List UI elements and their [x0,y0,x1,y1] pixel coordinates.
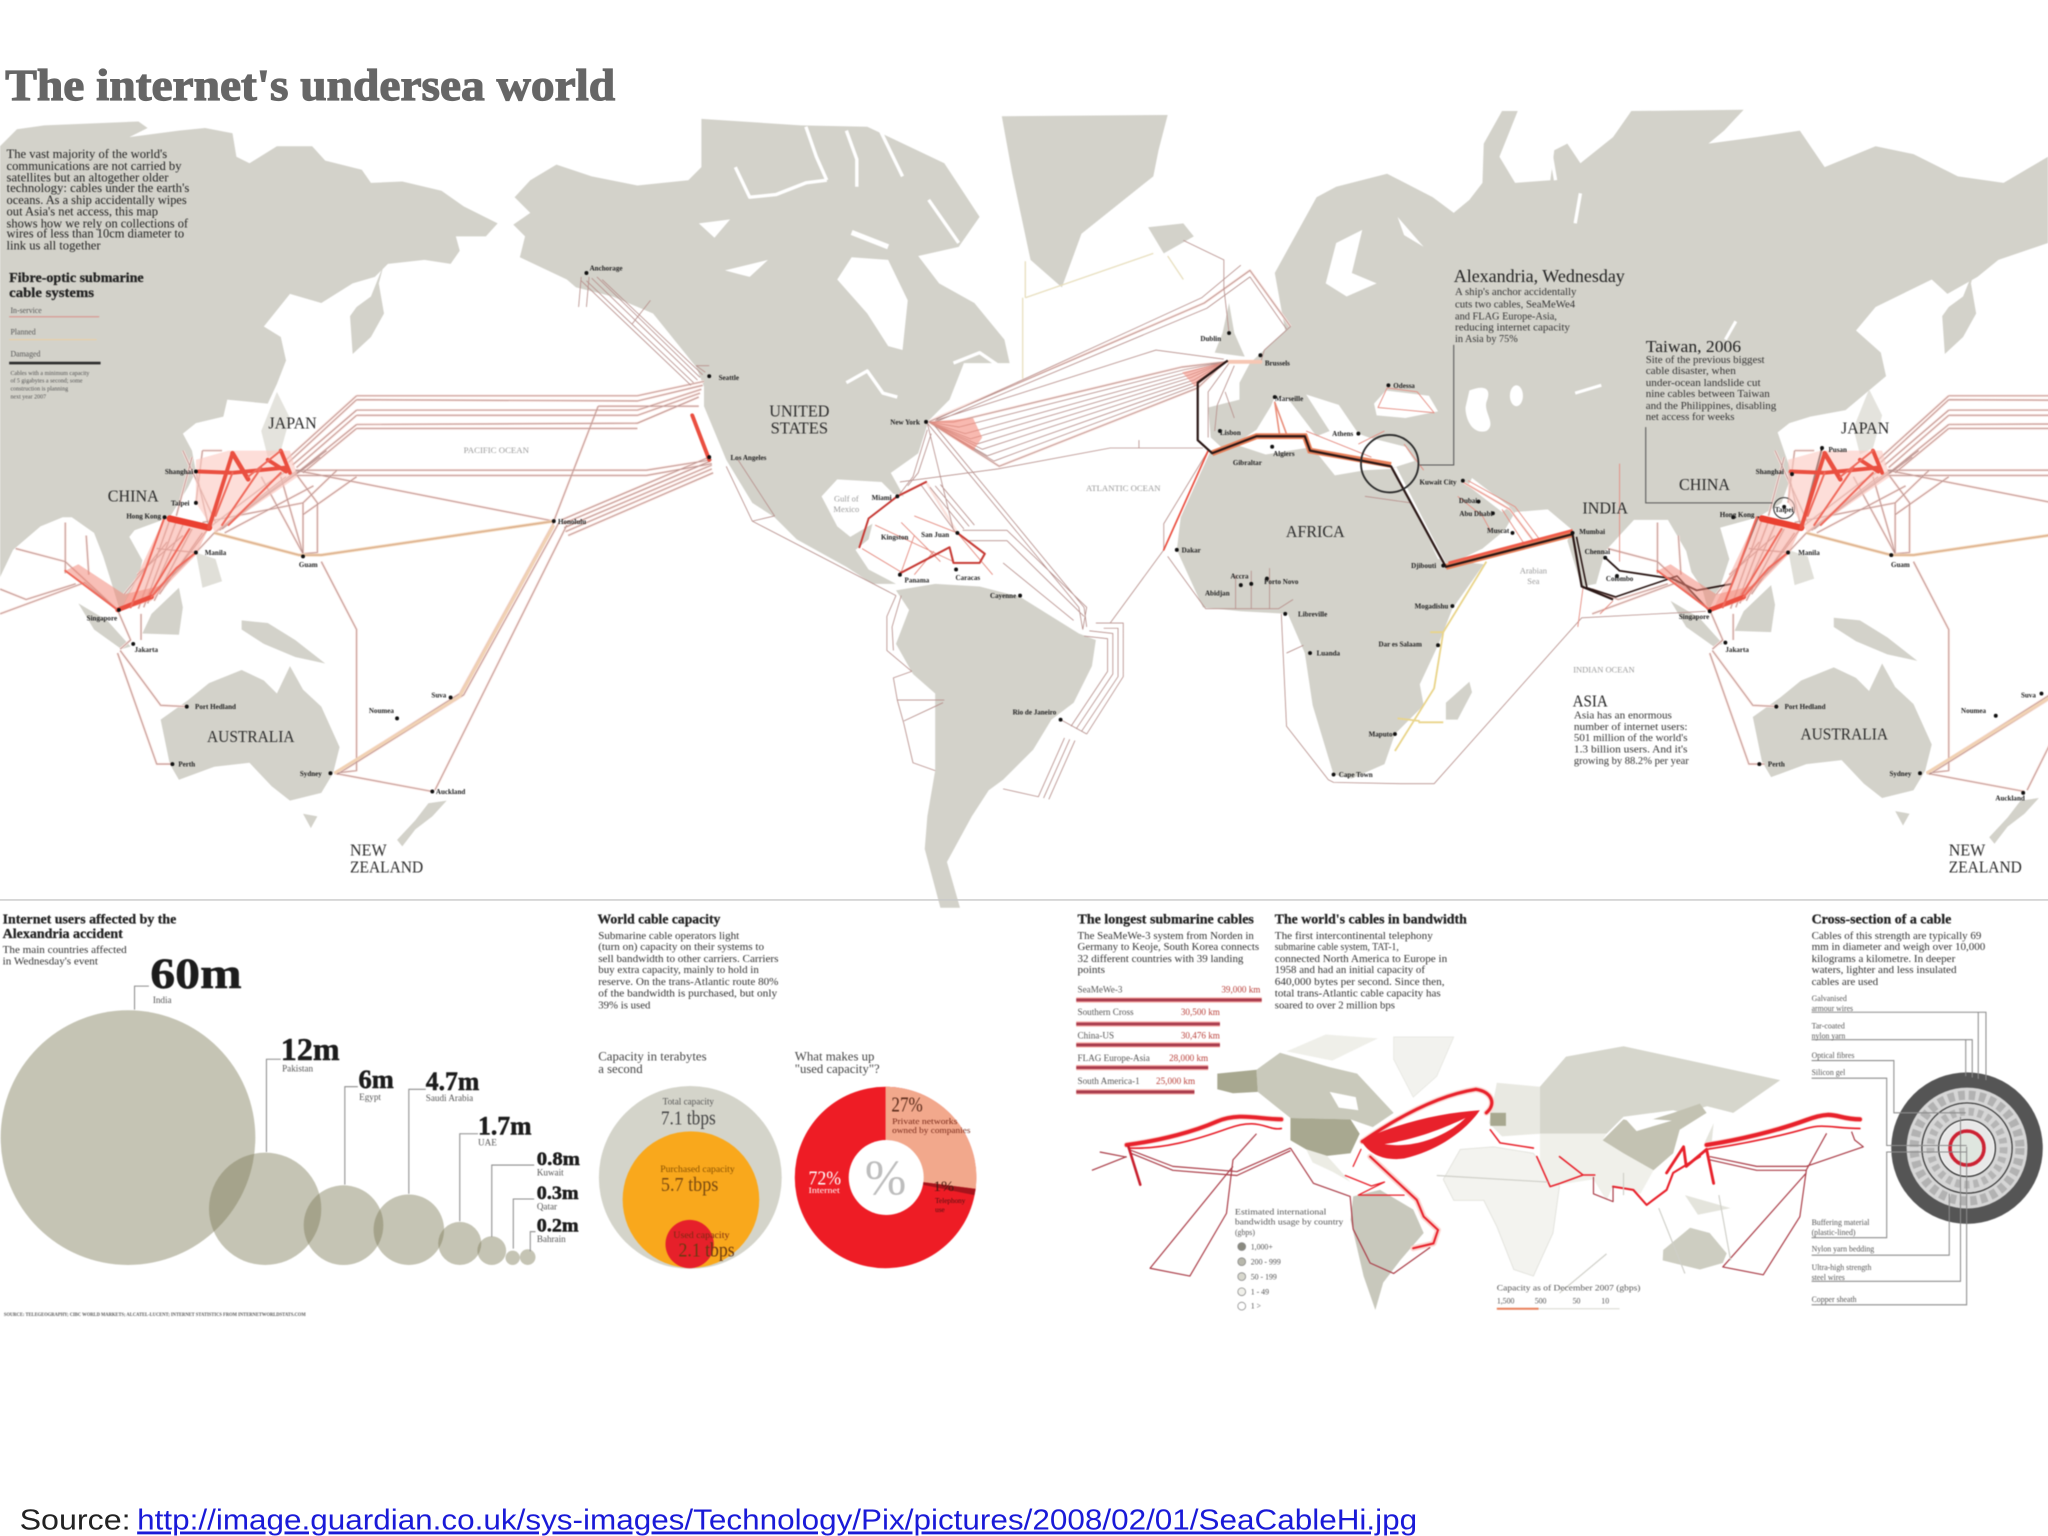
ocean labels: ATLANTIC OCEAN [1086,483,1160,493]
body text: The SeaMeWe-3 system from Norden in [1078,931,1255,942]
mini world map: land by usage [1217,1034,1780,1310]
cables: pale halo [0,270,2048,792]
city labels: Singapore [1679,613,1709,621]
city labels: Los Angeles [730,454,767,462]
intro text block: shows how we rely on collections of [7,215,189,230]
city labels: Shanghai [1756,468,1784,476]
value: Kuwait [537,1149,580,1178]
country labels: NEW [1949,841,1985,860]
body text: 39% is used [598,1000,651,1011]
mini map legend: bandwidth usage: 1 - 49 [1251,1287,1269,1296]
country labels [108,402,2022,876]
city labels: Port Hedland [195,703,236,711]
used capacity subheading [795,1050,880,1076]
panel: internet users affected [1,911,580,1318]
heading: in Wednesday's event [3,957,98,968]
body text: submarine cable system, TAT-1, [1275,942,1399,953]
intro text block [7,146,189,252]
callout: Asia: 501 million of the world's [1574,733,1688,744]
legend: fibre-optic cable systems: Fibre-optic submarine [9,270,144,285]
body text: The first intercontinental telephony [1275,931,1434,942]
capacity subheading [598,1050,707,1076]
city labels: Noumea [1961,707,1987,715]
capacity subheading: a second [598,1062,643,1076]
body text [1078,931,1259,976]
city labels: Kingston [881,533,908,541]
body text: connected North America to Europe in [1275,954,1448,965]
leader lines [1812,1012,1986,1305]
bar chart: cable lengths: 39,000 km [1221,985,1260,995]
city labels: Honolulu [558,518,586,526]
city labels: Caracas [956,574,980,582]
mini map legend: capacity: 50 [1573,1297,1580,1306]
city labels: Athens [1332,430,1354,438]
donut chart: Internet [808,1186,841,1195]
city labels [87,264,2036,803]
callout: Alexandria: A ship's anchor accidentally [1455,287,1577,298]
panel: cables in bandwidth [1092,911,1863,1311]
ocean labels: PACIFIC OCEAN [464,445,529,455]
intro text block: out Asia's net access, this map [7,204,158,219]
bar chart: cable lengths: SeaMeWe-3 [1078,985,1123,995]
source footer: http://image.guardian.co.uk/sys-images/Technology/Pix/pictures/2008/02/01/SeaCableHi.jpg [137,1504,1417,1536]
bar chart: cable lengths: Southern Cross [1078,1007,1134,1017]
country labels: AUSTRALIA [207,727,295,746]
city labels: Luanda [1317,650,1341,658]
callout: Taiwan: Site of the previous biggest [1646,355,1765,366]
body text: mm in diameter and weigh over 10,000 [1812,942,1985,953]
panel: world cable capacity [598,911,976,1269]
city labels: Panama [905,577,930,585]
city labels: Suva [2021,691,2036,699]
city dots [119,273,2041,793]
city labels: Singapore [87,614,117,622]
callout: Asia: 1.3 billion users. And it's [1574,744,1688,755]
city labels: Sydney [1889,770,1912,778]
component labels: Tar-coated [1812,1022,1845,1031]
component labels: nylon yarn [1812,1031,1845,1040]
body text: Germany to Keoje, South Korea connects [1078,942,1259,953]
city labels: Brussels [1265,360,1290,368]
mini map legend: bandwidth usage: 1 > [1251,1302,1262,1311]
body text: (turn on) capacity on their systems to [598,942,764,953]
country labels: JAPAN [268,413,317,432]
mini map legend: bandwidth usage: (gbps) [1235,1228,1255,1237]
heading: The longest submarine cables [1078,911,1254,926]
city labels: Libreville [1298,610,1327,618]
donut chart: owned by companies [892,1125,970,1135]
body text: soared to over 2 million bps [1275,1000,1395,1011]
legend: fibre-optic cable systems: Planned [10,327,36,336]
component labels [1812,994,1874,1304]
callout: Asia: ASIA [1573,692,1608,711]
ocean labels: Sea [1527,576,1540,586]
country labels: ZEALAND [1949,857,2022,876]
country labels: JAPAN [1841,419,1889,438]
donut chart: 1% [933,1179,954,1195]
city labels: Seattle [719,374,739,382]
cable cross-section diagram [1899,1080,2035,1216]
cables: damaged routes Europe to Asia [1198,360,1822,611]
value: UAE: UAE [478,1137,497,1147]
city labels: Taipei [171,499,190,507]
city labels: Cayenne [990,592,1016,600]
legend: fibre-optic cable systems: construction is planning [10,387,68,393]
legend: fibre-optic cable systems [9,270,144,400]
intro text block: technology: cables under the earth's [7,180,189,195]
legend: fibre-optic cable systems: next year 2007 [10,394,46,400]
cables: Asia thick bundles, right [1657,451,2048,773]
nested capacity circles: Used capacity [673,1230,730,1240]
city labels: Manila [1798,549,1820,557]
city labels: Guam [299,561,318,569]
city labels: Marseille [1275,395,1303,403]
city labels: Suva [431,691,447,699]
mini world map: cable capacity lines [1092,1089,1863,1293]
intro text block: link us all together [7,237,101,252]
mini map legend: capacity [1497,1283,1641,1309]
callout: Taiwan: Taiwan, 2006 [1646,337,1741,356]
country labels: STATES [771,419,828,438]
nested capacity circles: 2.1 tbps [679,1240,735,1261]
title: The internet's undersea world [5,60,616,110]
heading: The main countries affected [3,945,128,956]
intro text block: communications are not carried by [7,158,182,173]
city labels: Lisbon [1220,429,1241,437]
city labels: Pusan [1829,446,1847,454]
legend: fibre-optic cable systems: Cables with a minimum capacity [10,371,89,377]
value: India: 60m [150,951,242,998]
value: Egypt: 6m [359,1065,394,1094]
value: Kuwait: 0.8m [537,1149,580,1170]
bar chart: cable lengths: 25,000 km [1156,1076,1195,1086]
city labels: Dublin [1200,335,1221,343]
nested capacity circles: 5.7 tbps [661,1175,718,1196]
mini map legend: bandwidth usage: 1,000+ [1251,1242,1273,1251]
cable: yellow planned route [1395,562,1486,751]
component labels: steel wires [1812,1273,1845,1282]
city labels: Miami [872,494,892,502]
city labels: Auckland [1995,795,2025,803]
legend: fibre-optic cable systems: In-service [10,306,42,315]
cables: pale planned north Atlantic [1023,253,1183,379]
used capacity subheading: What makes up [795,1050,874,1064]
city labels: Auckland [436,788,465,796]
body text: total trans-Atlantic cable capacity has [1275,989,1441,1000]
mini map legend: bandwidth usage: 200 - 999 [1251,1257,1281,1266]
callout: Alexandria: Alexandria, Wednesday [1454,266,1625,286]
body text: Submarine cable operators light [598,931,739,942]
nested capacity circles: Total capacity [663,1096,714,1106]
bar chart: cable lengths: China-US [1078,1030,1114,1040]
donut chart: Private networks [892,1116,957,1126]
component labels: Ultra-high strength [1812,1263,1871,1272]
cables: in-service lines [0,240,2048,799]
city labels: Dakar [1182,546,1201,554]
city labels: Jakarta [135,646,158,654]
donut chart: 72% [808,1169,841,1190]
city labels: Noumea [369,707,394,715]
bar chart: cable lengths: 28,000 km [1169,1053,1208,1063]
city labels: Manila [205,549,227,557]
source footer: Source: [20,1504,131,1536]
body text: of the bandwidth is purchased, but only [598,989,778,1000]
legend: fibre-optic cable systems: of 5 gigabytes a second; some [10,378,83,385]
city labels: Chennai [1585,548,1610,556]
intro text block: oceans. As a ship accidentally wipes [7,192,187,207]
body text [1275,931,1448,1011]
callout: Taiwan: nine cables between Taiwan [1646,389,1771,400]
callout: Asia: number of internet users: [1574,722,1688,733]
proportional circles [1,1010,536,1265]
donut chart: Telephony [935,1197,966,1205]
city labels: Anchorage [590,264,622,272]
world map with cables [0,110,2048,908]
heading: Internet users affected by the [3,911,176,926]
value: Pakistan: Pakistan [282,1064,313,1074]
city labels: Dubai [1459,497,1477,505]
body text: Cables of this strength are typically 69 [1812,931,1981,942]
ocean labels: INDIAN OCEAN [1573,665,1635,675]
value: Bahrain [537,1216,579,1244]
heading: World cable capacity [598,911,720,926]
component labels: armour wires [1812,1004,1853,1013]
mini map legend: capacity: 500 [1535,1297,1547,1306]
city labels: Maputo [1369,731,1393,739]
ocean labels: Arabian [1520,565,1548,575]
donut chart [795,1087,976,1268]
callout: Asia: Asia has an enormous [1574,710,1672,721]
mini map legend: capacity: 1,500 [1497,1297,1515,1306]
leader lines [135,986,536,1251]
heading: Cross-section of a cable [1812,911,1951,926]
legend: fibre-optic cable systems: Damaged [10,350,41,359]
component labels: Buffering material [1812,1218,1870,1227]
city labels: Porto Novo [1264,578,1299,586]
bar chart: cable lengths: 30,500 km [1181,1007,1220,1017]
mini map legend: bandwidth usage [1235,1208,1343,1311]
city labels: Taipei [1775,506,1793,514]
body text: kilograms a kilometre. In deeper [1812,954,1956,965]
component labels: Galvanised [1812,994,1847,1003]
mini map legend: capacity: 10 [1601,1297,1609,1306]
component labels: Copper sheath [1812,1295,1857,1304]
bar chart: cable lengths [1076,985,1262,1092]
city labels: Odessa [1393,382,1415,390]
callout: Alexandria: in Asia by 75% [1455,334,1518,345]
callout: Asia [1573,692,1689,767]
ocean labels: Mexico [833,504,859,514]
city labels: Cape Town [1339,771,1373,779]
donut chart: use [935,1206,945,1214]
body text [1812,931,1985,988]
callout: Taiwan: net access for weeks [1646,412,1735,423]
city labels: Shanghai [165,468,193,476]
intro text block: wires of less than 10cm diameter to [7,226,185,241]
city labels: Hong Kong [126,513,161,521]
country labels: ZEALAND [350,857,423,876]
value: Pakistan: 12m [281,1032,340,1067]
city labels: Gibraltar [1233,459,1262,467]
callout lines and damage circles [1361,345,1795,519]
component labels: (plastic-lined) [1812,1228,1856,1237]
city labels: Rio de Janeiro [1013,708,1057,716]
nested capacity circles: Purchased capacity [660,1164,735,1174]
city labels: Abu Dhabi [1459,510,1493,518]
callout: Alexandria: and FLAG Europe-Asia, [1455,311,1557,322]
source line: SOURCE: TELEGEOGRAPHY; CIBC WORLD MARKETS; ALCATEL-LUCENT; INTERNET STATISTICS FROM INTERNETWORLDSTATS.COM [4,1313,306,1318]
callout: Taiwan: cable disaster, when [1646,366,1737,377]
body text: buy extra capacity, mainly to hold in [598,965,760,976]
value: Bahrain: Bahrain [537,1234,566,1244]
bar chart: cable lengths: 30,476 km [1181,1030,1220,1040]
body text: reserve. On the trans-Atlantic route 80% [598,977,779,988]
land: continents [0,110,2048,908]
city labels: Dar es Salaam [1378,641,1422,649]
body text: 1958 and had an initial capacity of [1275,965,1426,976]
callout: Taiwan [1646,337,1777,423]
city labels: Perth [178,761,195,769]
intro text block: satellites but an altogether older [7,170,169,185]
capacity subheading: Capacity in terabytes [598,1050,707,1064]
body text: 640,000 bytes per second. Since then, [1275,977,1445,988]
cables: red bundles [862,388,1620,627]
city labels: New York [890,418,920,426]
country labels: AFRICA [1286,522,1345,541]
callout: Taiwan: under-ocean landslide cut [1646,378,1761,389]
country labels: AUSTRALIA [1800,724,1889,743]
callout: Alexandria: reducing internet capacity [1455,322,1571,333]
heading: Alexandria accident [3,926,123,941]
callout: Taiwan: and the Philippines, disabling [1646,401,1777,412]
callout: Alexandria: cuts two cables, SeaMeWe4 [1455,300,1576,311]
value: India: India [153,995,172,1005]
city labels: Sydney [300,770,322,778]
city labels: Hong Kong [1720,511,1755,519]
panel: longest submarine cables [1076,911,1262,1092]
legend: fibre-optic cable systems: cable systems [9,285,94,300]
heading: The world's cables in bandwidth [1275,911,1467,926]
value: Kuwait: Kuwait [537,1168,564,1178]
mini map legend: bandwidth usage: 50 - 199 [1251,1272,1277,1281]
value: Saudi Arabia: 4.7m [426,1067,480,1096]
body text: sell bandwidth to other carriers. Carriers [598,954,778,965]
value: Qatar: Qatar [537,1201,557,1211]
city labels: Mumbai [1579,528,1605,536]
value: UAE: 1.7m [478,1111,532,1140]
city labels: San Juan [921,531,949,539]
donut chart: 27% [891,1093,923,1117]
bar chart: cable lengths: South America-1 [1078,1076,1140,1086]
cables: Asia thick bundles, left [65,451,554,773]
ocean labels: Gulf of [834,494,859,504]
heading [3,911,176,968]
country labels: CHINA [108,487,159,506]
body text: waters, lighter and less insulated [1812,965,1957,976]
used capacity subheading: "used capacity"? [795,1062,880,1076]
country labels: CHINA [1679,475,1731,494]
country labels: UNITED [769,402,829,421]
city labels: Perth [1768,761,1785,769]
city labels: Abidjan [1205,590,1230,598]
bar chart: cable lengths: FLAG Europe-Asia [1078,1053,1150,1063]
city labels: Algiers [1273,450,1295,458]
component labels: Nylon yarn bedding [1812,1244,1874,1253]
component labels: Optical fibres [1812,1051,1854,1060]
panel: cross-section of a cable [1812,911,2035,1305]
value: Bahrain: 0.2m [537,1216,579,1237]
mini map legend: capacity: Capacity as of December 2007 (gbps) [1497,1283,1641,1292]
component labels: Silicon gel [1812,1068,1846,1077]
value: Saudi Arabia: Saudi Arabia [426,1093,473,1103]
city labels: Jakarta [1725,646,1749,654]
body text: cables are used [1812,977,1879,988]
nested capacity circles [599,1086,782,1269]
city labels: Mogadishu [1415,603,1448,611]
body text: 32 different countries with 39 landing [1078,954,1244,965]
country labels: INDIA [1582,498,1629,517]
value: Egypt: Egypt [359,1092,381,1102]
city labels: Port Hedland [1785,703,1826,711]
city labels: Muscat [1487,527,1510,535]
city labels: Accra [1231,573,1249,581]
body text [598,931,779,1011]
country labels: NEW [350,841,387,860]
mini map legend: bandwidth usage: Estimated international [1235,1208,1327,1217]
callout: Asia: growing by 88.2% per year [1574,756,1689,767]
nested capacity circles: 7.1 tbps [661,1109,716,1130]
ocean labels [464,445,1635,675]
city labels: Kuwait City [1420,479,1457,487]
callout: Alexandria [1454,266,1625,345]
city labels: Guam [1891,561,1910,569]
city labels: Djibouti [1411,562,1436,570]
value: Qatar: 0.3m [537,1183,579,1204]
city labels: Colombo [1606,575,1634,583]
intro text block: The vast majority of the world's [7,146,167,161]
body text: points [1078,965,1105,976]
donut chart: % [865,1150,906,1205]
value: Qatar [537,1183,579,1211]
mini map legend: bandwidth usage: bandwidth usage by country [1235,1217,1343,1226]
